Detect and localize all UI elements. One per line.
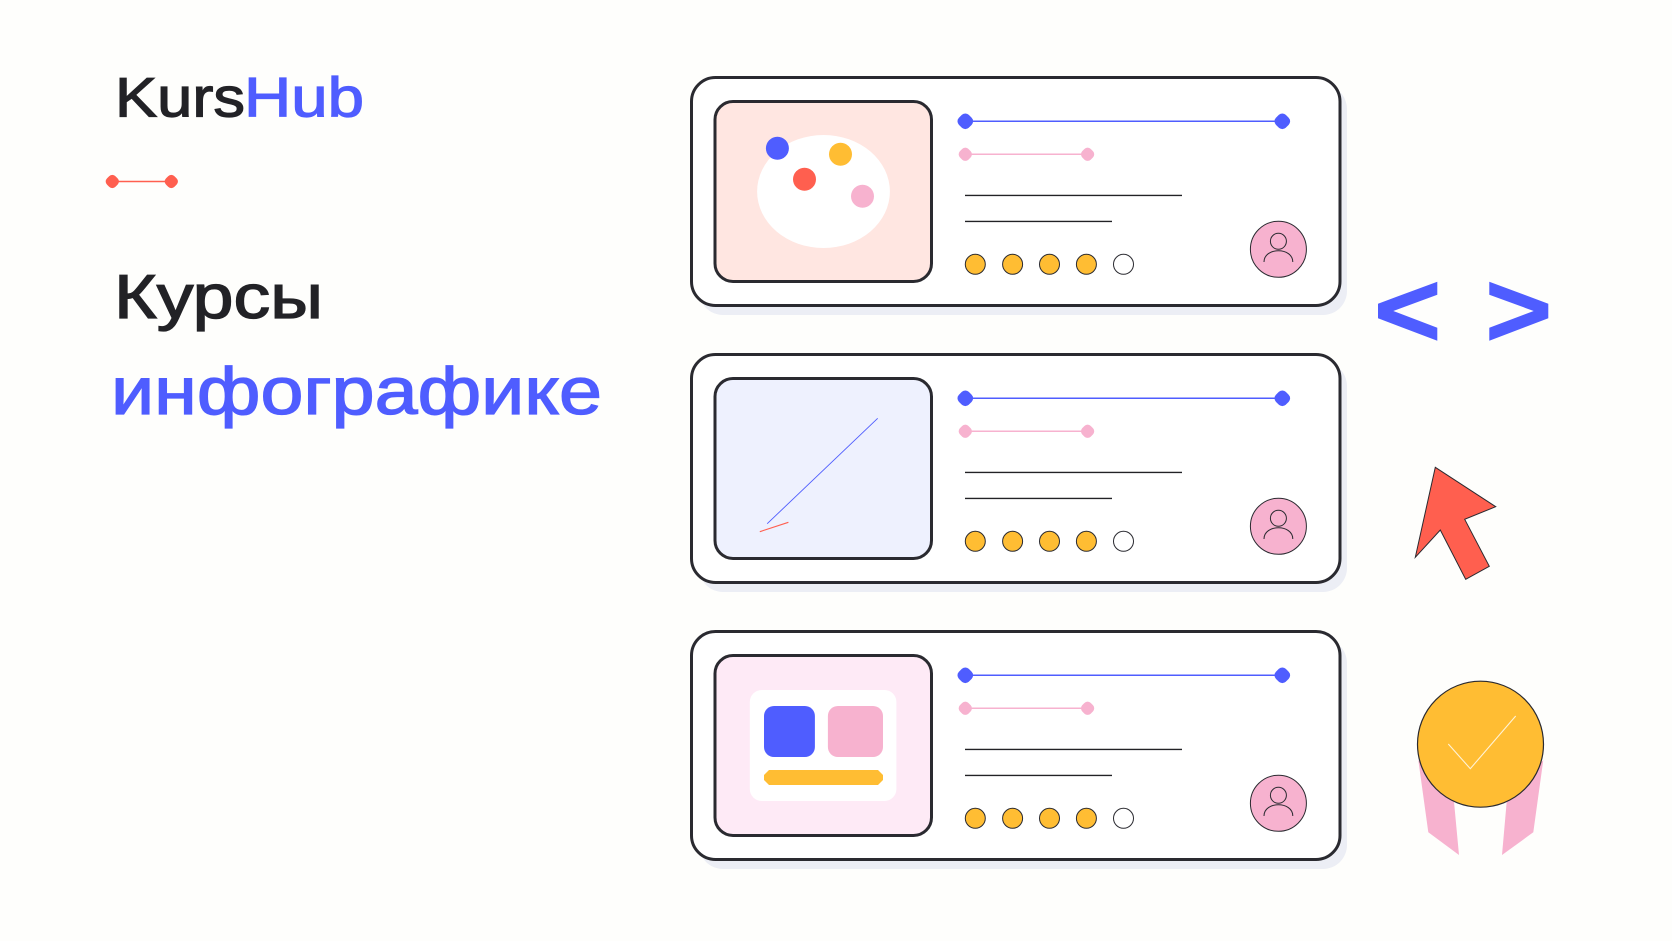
icon: cursor arrow [1415,467,1496,579]
subtitle placeholder line [957,146,1096,163]
text placeholder lines [965,195,1182,221]
panel: course card 2 [692,354,1347,592]
icon: avatar [1250,775,1306,831]
heading line 1: Курсы [114,263,323,332]
logo: KursHub: Hub [244,65,364,128]
icon: code brackets [1378,282,1548,341]
text placeholder lines [965,749,1182,775]
decorative connector: red line with dots [104,173,180,190]
rating dots [965,254,1134,274]
logo: KursHub [115,65,364,128]
icon: avatar [1250,498,1306,554]
title placeholder line [955,665,1292,685]
logo: KursHub: Kurs [115,65,245,128]
icon: medal [1418,681,1544,855]
heading line 2: инфографике [111,354,602,429]
thumbnail: layout blocks [715,656,932,836]
subtitle placeholder line [957,423,1096,440]
title placeholder line [955,111,1292,131]
text placeholder lines [965,472,1182,498]
heading [111,263,602,429]
thumbnail: pencil lines [715,378,932,558]
title placeholder line [955,388,1292,408]
rating dots [965,808,1134,828]
thumbnail: palette [715,102,932,282]
subtitle placeholder line [957,700,1096,717]
panel: course card 3 [692,632,1347,869]
rating dots [965,531,1134,551]
panel: course card 1 [692,78,1347,315]
icon: avatar [1250,221,1306,277]
